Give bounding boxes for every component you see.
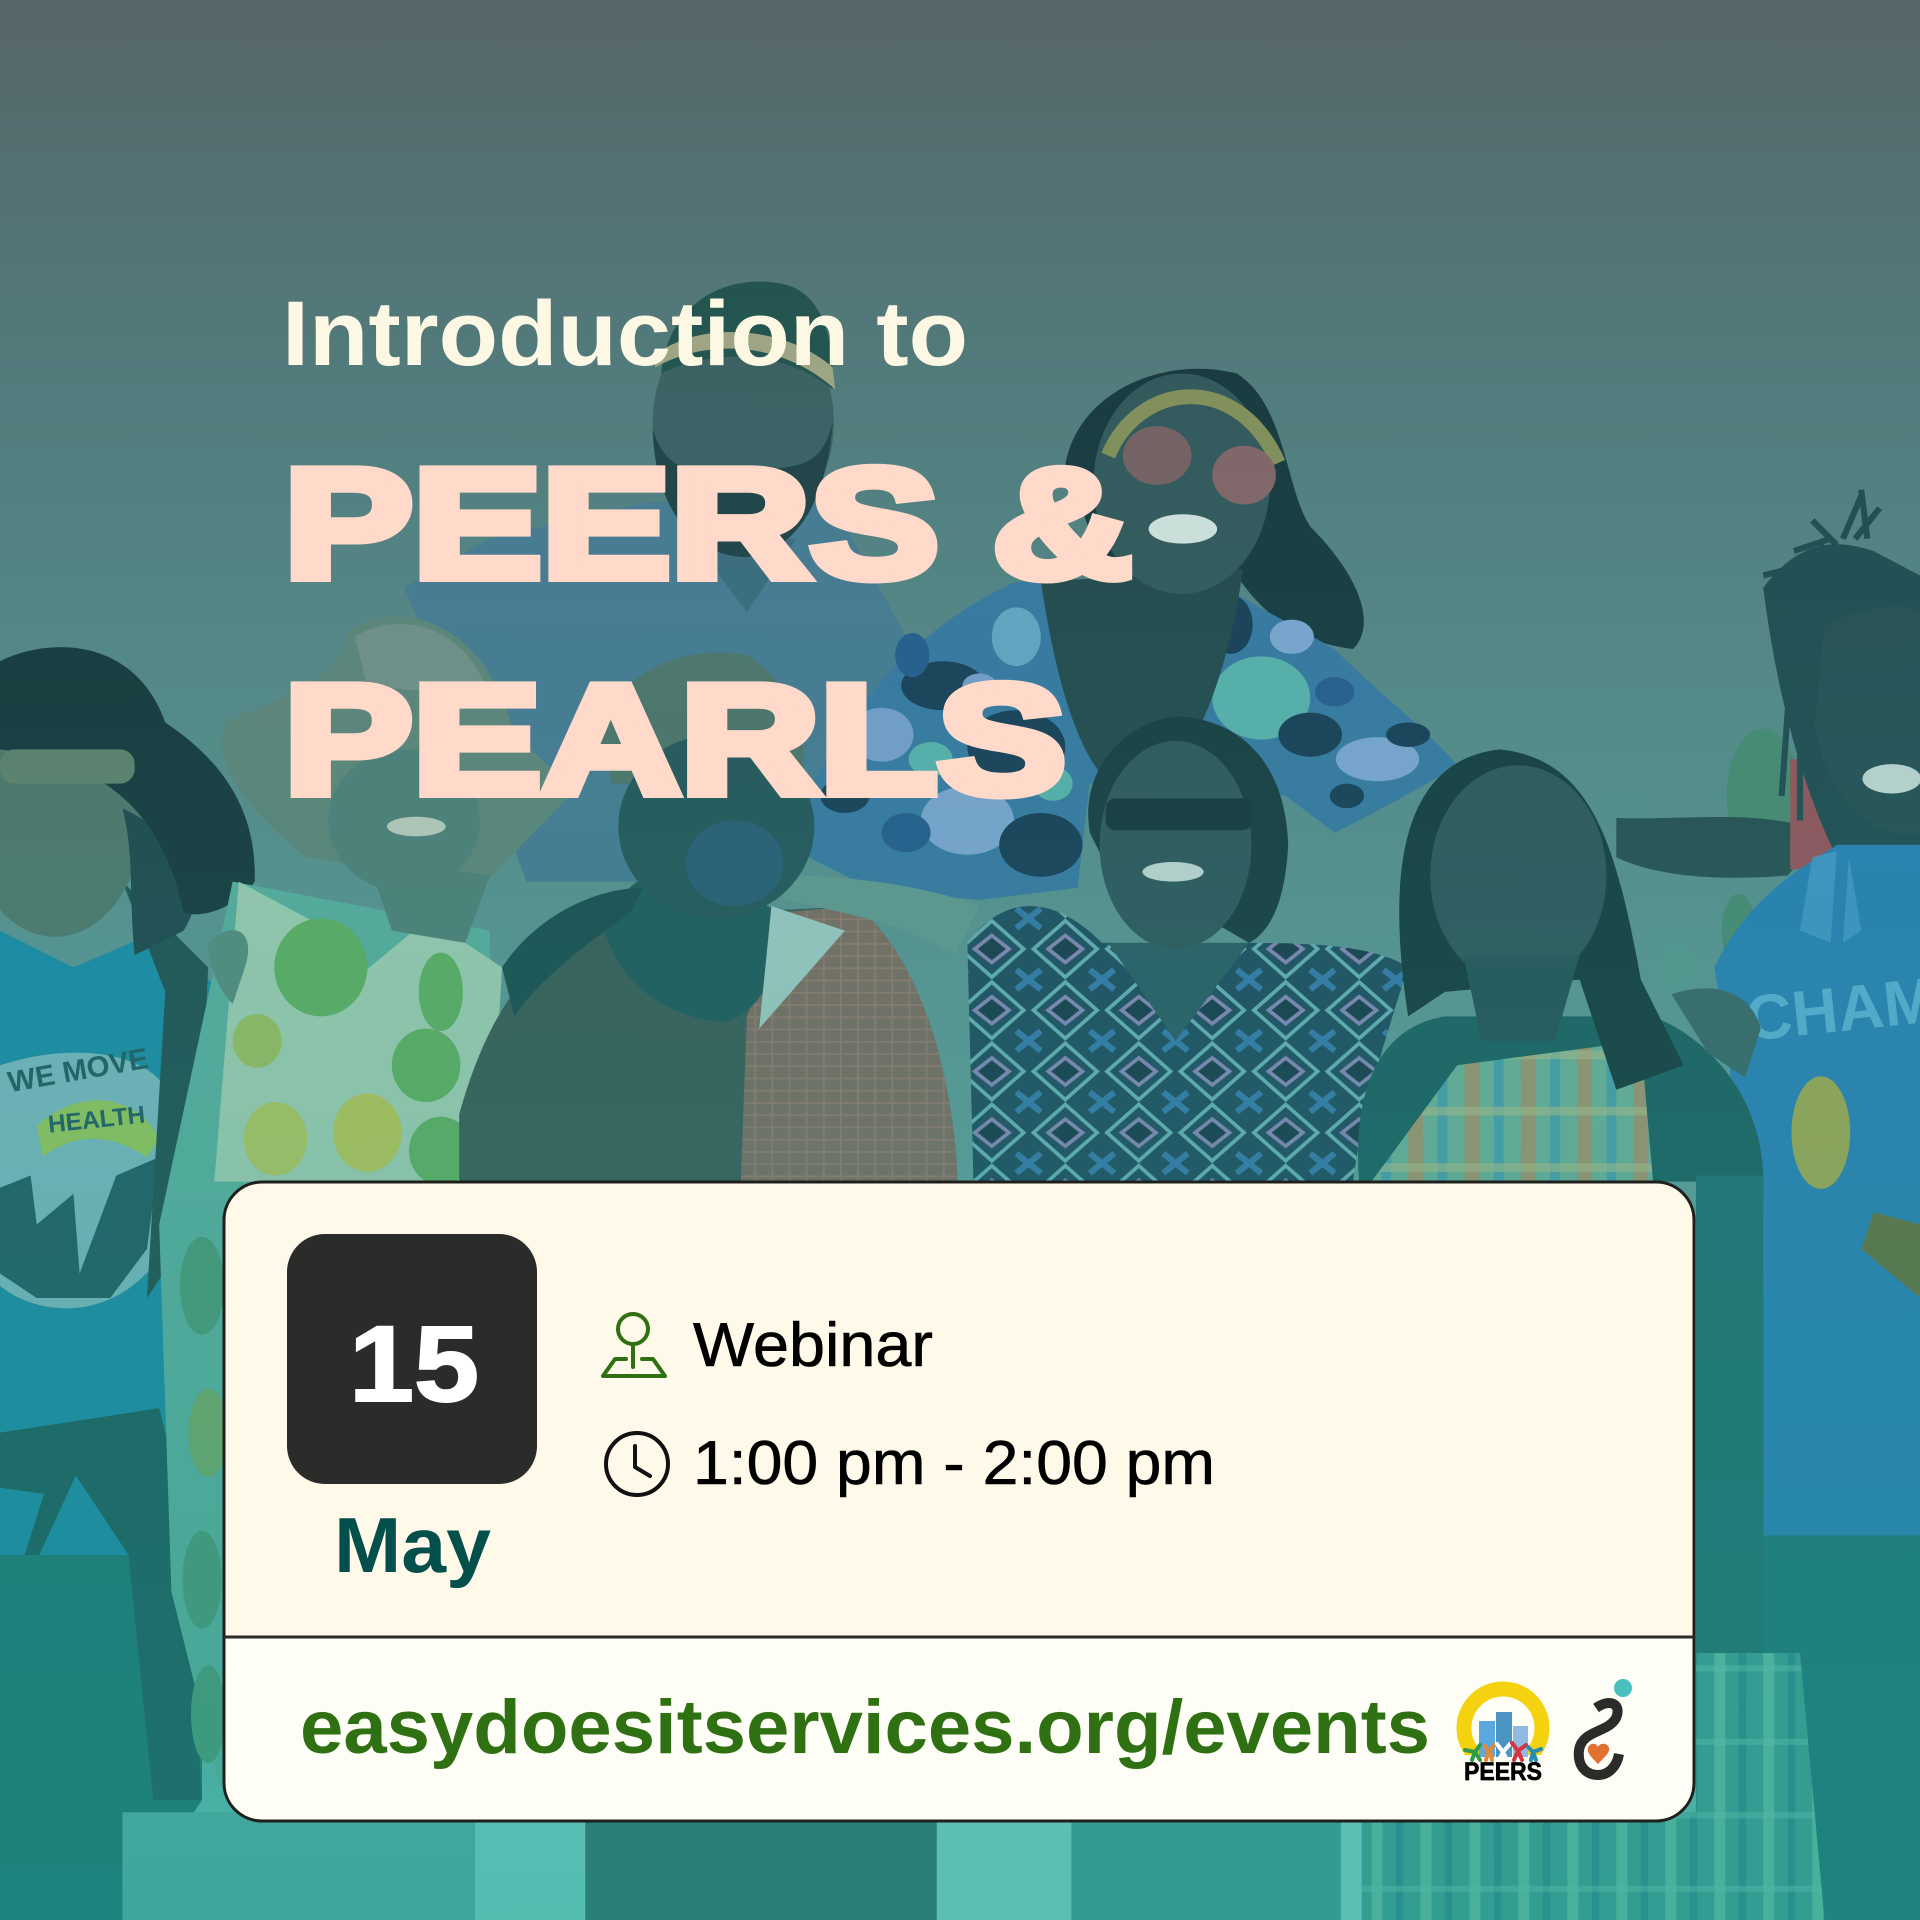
logo wordmark: PEERS bbox=[1464, 1758, 1542, 1786]
back man bbox=[404, 282, 906, 882]
logo: Easy Does It bbox=[1579, 1679, 1632, 1775]
fifth woman, plaid dress and braids bbox=[1358, 749, 1763, 1182]
second woman, straw hat and lemon dress bbox=[159, 616, 576, 1788]
ground and legs under the card bbox=[122, 1176, 1824, 1920]
heading: Introduction to: Introduction to bbox=[282, 283, 968, 385]
event card bbox=[224, 1182, 1694, 1821]
month: May bbox=[334, 1501, 491, 1589]
left woman with black hat: HEALTH bbox=[47, 1102, 146, 1139]
title: PEARLS: PEARLS bbox=[284, 653, 1066, 826]
shirt logo text: WE MOVE bbox=[5, 1042, 151, 1099]
icon: location pin bbox=[603, 1314, 665, 1376]
website link: easydoesitservices.org/events bbox=[300, 1685, 1430, 1770]
top-centre woman bbox=[784, 369, 1824, 900]
time text: 1:00 pm - 2:00 pm bbox=[693, 1429, 1215, 1498]
logo: PEERS bbox=[1459, 1689, 1547, 1786]
right person with dreadlocks bbox=[1714, 490, 1920, 1920]
date box bbox=[287, 1234, 537, 1484]
date number: 15 bbox=[349, 1303, 479, 1424]
fourth woman, patterned dress bbox=[967, 716, 1408, 1182]
title: PEERS &: PEERS & bbox=[284, 437, 1132, 610]
icon: clock bbox=[606, 1433, 668, 1495]
third woman, red dress bbox=[459, 652, 980, 1182]
location text: Webinar bbox=[693, 1311, 933, 1380]
tree bbox=[1660, 729, 1800, 992]
left woman with black hat bbox=[0, 647, 255, 1920]
